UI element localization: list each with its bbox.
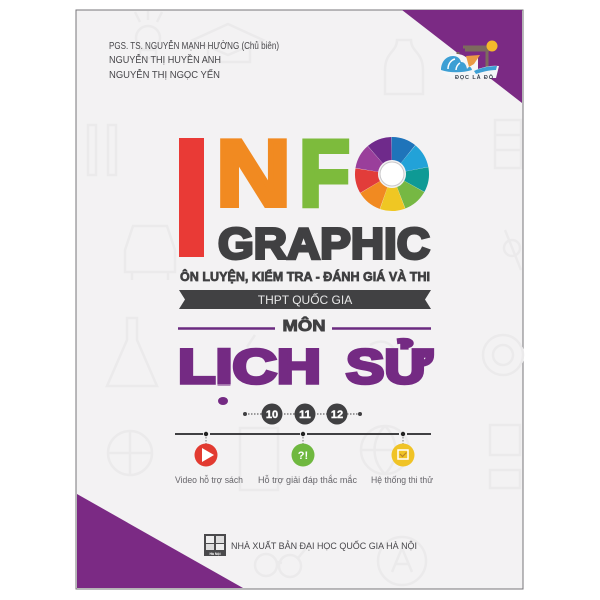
icon: clipboard — [240, 428, 278, 490]
icon: basketball — [108, 431, 152, 475]
author 1: PGS. TS. NGUYỄN MẠNH HƯỜNG (Chủ biên) — [109, 39, 279, 52]
icon: chart — [495, 120, 521, 168]
divider lines — [178, 327, 431, 330]
subtitle: ÔN LUYỆN, KIỂM TRA - ĐÁNH GIÁ VÀ THI — [180, 269, 430, 284]
triangle: top right — [402, 10, 522, 103]
logo: university press: Hà Nội — [209, 552, 221, 556]
heading: LỊCH SỬ — [178, 339, 432, 394]
letter I — [177, 107, 207, 292]
icon: apple and books — [490, 425, 520, 488]
caption: video: Video hỗ trợ sách — [175, 475, 243, 486]
grade 11: 11 — [299, 409, 311, 421]
word: LỊCH: LỊCH — [178, 341, 321, 394]
icon: wrench — [504, 230, 521, 270]
icon: video play — [194, 444, 218, 466]
logo: university press — [204, 534, 226, 556]
colour wheel as letter O — [356, 138, 428, 210]
icon: light bulb — [135, 11, 162, 58]
icon: globe — [361, 426, 409, 474]
icon: glasses — [255, 546, 308, 577]
ribbon: THPT Quốc Gia: THPT QUỐC GIA — [258, 292, 352, 307]
letter F: F — [299, 120, 350, 226]
logo fox — [466, 55, 480, 67]
icon: question support: ?! — [298, 450, 308, 462]
title: GRAPHIC: GRAPHIC — [218, 220, 430, 268]
grade selector 10 11 12 — [243, 404, 362, 424]
icon: test tubes — [88, 125, 116, 175]
grade 10: 10 — [266, 409, 278, 421]
author 3: NGUYỄN THỊ NGỌC YẾN — [109, 68, 220, 81]
icon: question support — [292, 444, 314, 466]
triangle: bottom left — [77, 494, 243, 588]
letter N: N — [216, 120, 291, 226]
caption: test: Hệ thống thi thử — [371, 475, 434, 486]
icon: target — [483, 335, 523, 375]
timeline — [175, 432, 431, 444]
gap below letter I — [214, 386, 232, 396]
author 2: NGUYỄN THỊ HUYỀN ANH — [109, 53, 221, 66]
logo: publisher brand — [440, 40, 499, 81]
grade 12: 12 — [331, 409, 343, 421]
heading: MÔN: MÔN — [282, 316, 326, 335]
icon: flask behind title — [247, 335, 396, 357]
icon: test system — [392, 444, 414, 466]
icon: flask — [107, 318, 157, 386]
logo text: ĐỌC LÀ ĐỖ — [455, 74, 494, 81]
caption: support: Hỗ trợ giải đáp thắc mắc — [258, 475, 357, 486]
captions — [175, 475, 434, 486]
authors — [109, 39, 279, 81]
publisher name: NHÀ XUẤT BẢN ĐẠI HỌC QUỐC GIA HÀ NỘI — [231, 540, 417, 552]
title: INFO — [177, 107, 350, 292]
logo sun — [486, 40, 498, 52]
icon: letter A medal — [378, 537, 426, 585]
logo waves — [441, 56, 497, 74]
word: SỬ: SỬ — [346, 339, 432, 394]
icon: bell — [385, 40, 423, 94]
faint background icons — [88, 11, 523, 585]
panel: cover background — [76, 10, 523, 589]
icon: car — [125, 226, 175, 280]
logo bar — [458, 47, 491, 69]
icon: graduation cap — [193, 24, 263, 62]
letter I: I — [177, 107, 207, 292]
logo white backing — [440, 54, 499, 78]
logo wave foam — [448, 59, 460, 70]
ribbon: THPT Quốc Gia — [179, 290, 431, 309]
letter dot under I — [218, 397, 228, 405]
